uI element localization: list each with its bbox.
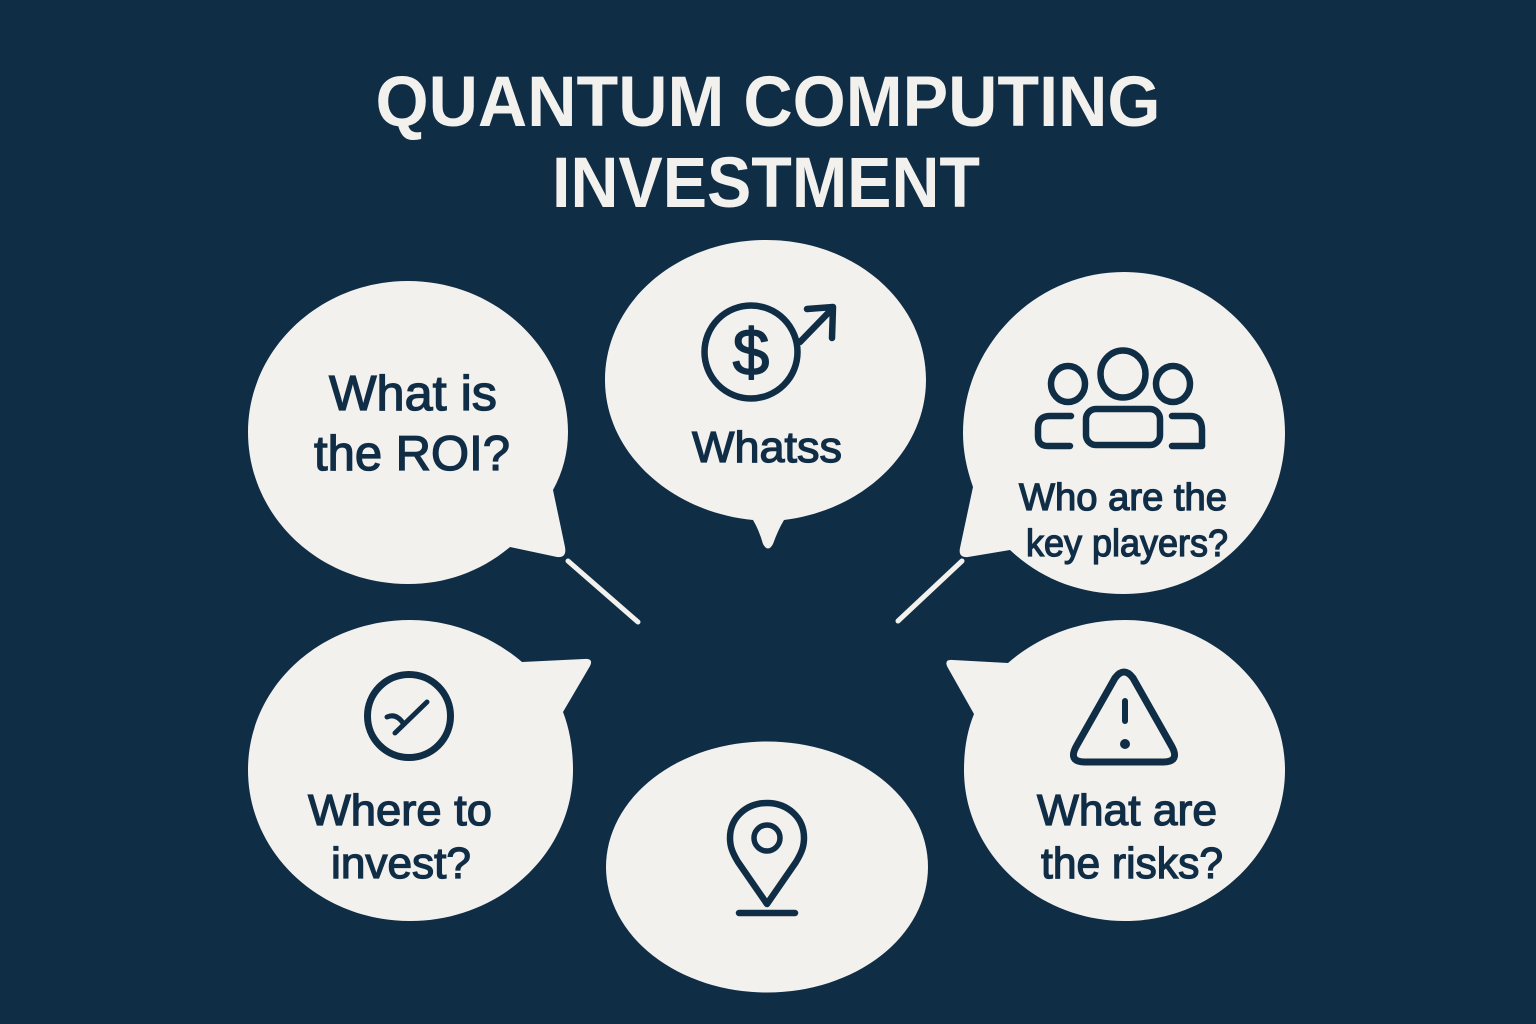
panel: what is the ROI: the ROI? bbox=[314, 427, 510, 481]
icon: check circle bbox=[368, 674, 450, 758]
panel: whatss bbox=[605, 240, 926, 548]
panel: risks bbox=[946, 620, 1285, 921]
title bbox=[376, 63, 1160, 223]
icon: warning bbox=[1073, 672, 1175, 762]
title: INVESTMENT bbox=[552, 144, 980, 223]
icon: people bbox=[1038, 350, 1202, 446]
panel: key players: Who are the bbox=[1019, 477, 1227, 519]
panel: what is the ROI: What is bbox=[329, 367, 497, 421]
panel: risks: the risks? bbox=[1041, 839, 1223, 888]
panel: key players: key players? bbox=[1026, 523, 1228, 565]
panel: where to invest bbox=[248, 620, 591, 921]
panel: where to invest: invest? bbox=[331, 839, 471, 888]
panel: whatss: Whatss bbox=[692, 423, 842, 472]
icon: dollar growth: $ bbox=[733, 315, 769, 389]
panel: key players bbox=[898, 272, 1285, 621]
panel: where to invest: Where to bbox=[308, 786, 492, 835]
panel: what is the ROI bbox=[248, 281, 638, 622]
icon: dollar growth bbox=[704, 306, 833, 398]
icon: map pin bbox=[730, 803, 804, 913]
panel: risks: What are bbox=[1037, 786, 1217, 835]
panel: location bbox=[606, 742, 928, 992]
title: QUANTUM COMPUTING bbox=[376, 63, 1160, 142]
